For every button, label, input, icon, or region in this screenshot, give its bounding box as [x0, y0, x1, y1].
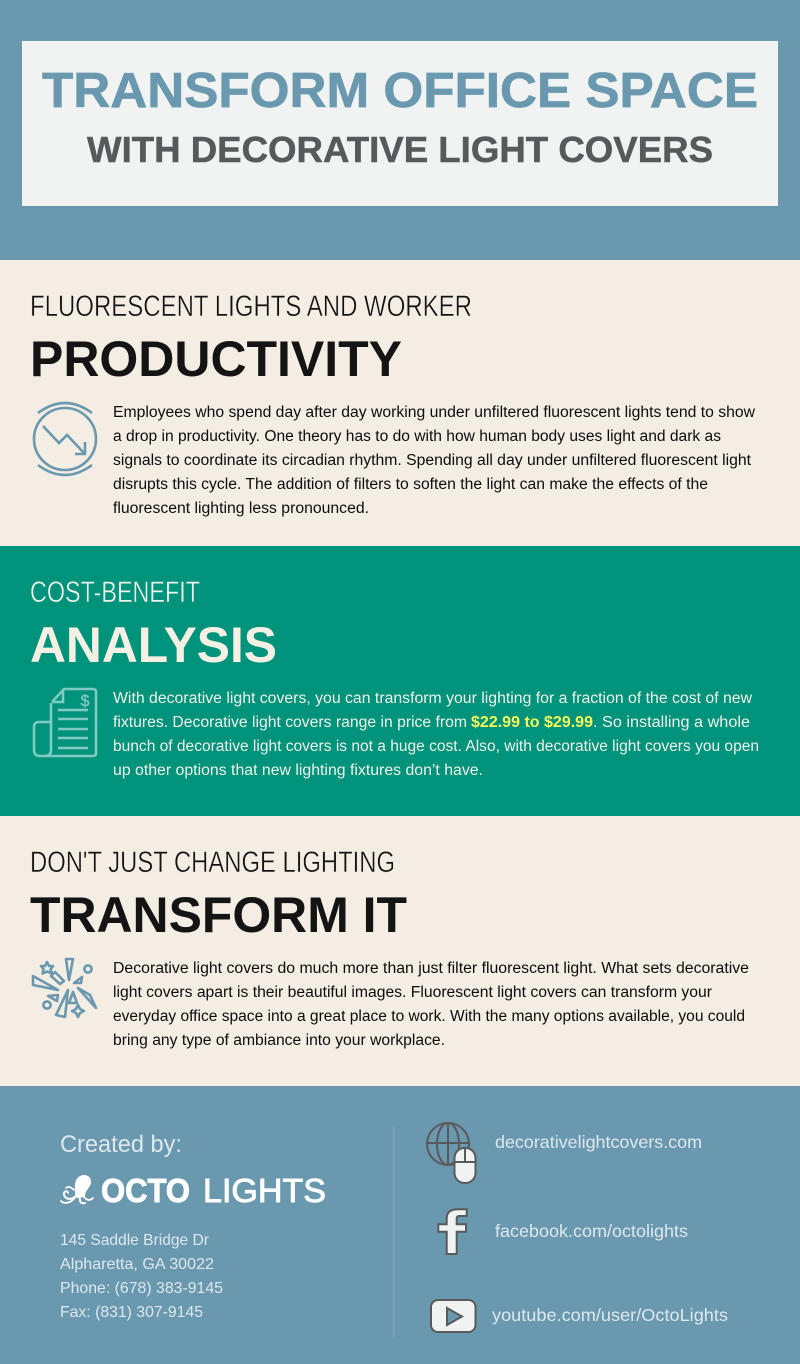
- text block: cost-benefit: With decorative light covers, you can transform your lighting for a fraction of the cost of new: [113, 690, 753, 707]
- heading: transform it: TRANSFORM IT: [30, 886, 407, 943]
- heading: cost-benefit: COST-BENEFIT: [30, 576, 200, 609]
- text block: cost-benefit: . So installing a whole: [593, 714, 750, 731]
- panel: transform it: [0, 816, 800, 1086]
- created by label: Created by:: [60, 1131, 182, 1158]
- icon: octopus: [61, 1175, 93, 1203]
- text block: productivity: a drop in productivity. One theory has to do with how human body uses light and dark as: [113, 428, 721, 445]
- icon: facebook: [438, 1209, 467, 1254]
- text block: productivity: fluorescent lighting less pronounced.: [113, 500, 369, 517]
- address block: Alpharetta, GA 30022: [60, 1256, 214, 1273]
- heading: productivity: PRODUCTIVITY: [30, 330, 402, 387]
- logo: octo lights: LIGHTS: [203, 1172, 326, 1209]
- address block: Phone: (678) 383-9145: [60, 1280, 223, 1297]
- text block: productivity: Employees who spend day after day working under unfiltered fluorescent lights tend to show: [113, 404, 756, 421]
- facebook link: facebook.com/octolights: [495, 1221, 688, 1241]
- header band: [0, 0, 800, 260]
- text block: productivity: signals to coordinate its circadian rhythm. Spending all day under unfiltered fluorescent light: [113, 452, 752, 469]
- icon: falling chart arrow: [34, 403, 96, 475]
- text block: transform it: everyday office space into a great place to work. With the many options available, you could: [113, 1008, 745, 1025]
- youtube link: youtube.com/user/OctoLights: [492, 1305, 728, 1325]
- heading: analysis: ANALYSIS: [30, 616, 277, 673]
- text block: transform it: Decorative light covers do much more than just filter fluorescent light. What sets decorative: [113, 960, 749, 977]
- price highlight: $22.99 to $29.99: [471, 714, 593, 731]
- icon: youtube: [431, 1300, 476, 1332]
- text block: cost-benefit: [113, 690, 759, 779]
- text block: productivity: disrupts this cycle. The addition of filters to soften the light can make the effects of the: [113, 476, 708, 493]
- icon: invoice document: [34, 689, 96, 756]
- title panel: [22, 41, 778, 206]
- heading: don't just change lighting: DON'T JUST CHANGE LIGHTING: [30, 846, 395, 879]
- logo: octo lights: [61, 1172, 326, 1209]
- subtitle: WITH DECORATIVE LIGHT COVERS: [87, 129, 713, 170]
- text block: transform it: [113, 960, 749, 1049]
- address block: Fax: (831) 307-9145: [60, 1304, 203, 1321]
- logo: octo lights: OCTO: [101, 1172, 190, 1209]
- text block: cost-benefit: up other options that new lighting fixtures don’t have.: [113, 762, 483, 779]
- heading: fluorescent lights and worker: FLUORESCENT LIGHTS AND WORKER: [30, 290, 472, 323]
- icon: globe and mouse: [427, 1123, 476, 1183]
- website link: decorativelightcovers.com: [495, 1132, 702, 1152]
- panel: cost-benefit analysis: [0, 546, 800, 816]
- text block: transform it: light covers apart is their beautiful images. Fluorescent light covers can transform your: [113, 984, 712, 1001]
- text block: transform it: bring any type of ambiance into your workplace.: [113, 1032, 445, 1049]
- text block: cost-benefit: fixtures. Decorative light covers range in price from: [113, 714, 467, 731]
- text block: cost-benefit: bunch of decorative light covers is not a huge cost. Also, with decorative light covers you open: [113, 738, 759, 755]
- icon: invoice document: $: [81, 693, 90, 710]
- address block: 145 Saddle Bridge Dr: [60, 1232, 210, 1249]
- title: TRANSFORM OFFICE SPACE: [42, 64, 758, 118]
- panel: productivity: [0, 260, 800, 546]
- address block: [60, 1232, 223, 1321]
- text block: productivity: [113, 404, 756, 517]
- icon: confetti burst: [33, 959, 96, 1017]
- panel: footer: [0, 1086, 800, 1364]
